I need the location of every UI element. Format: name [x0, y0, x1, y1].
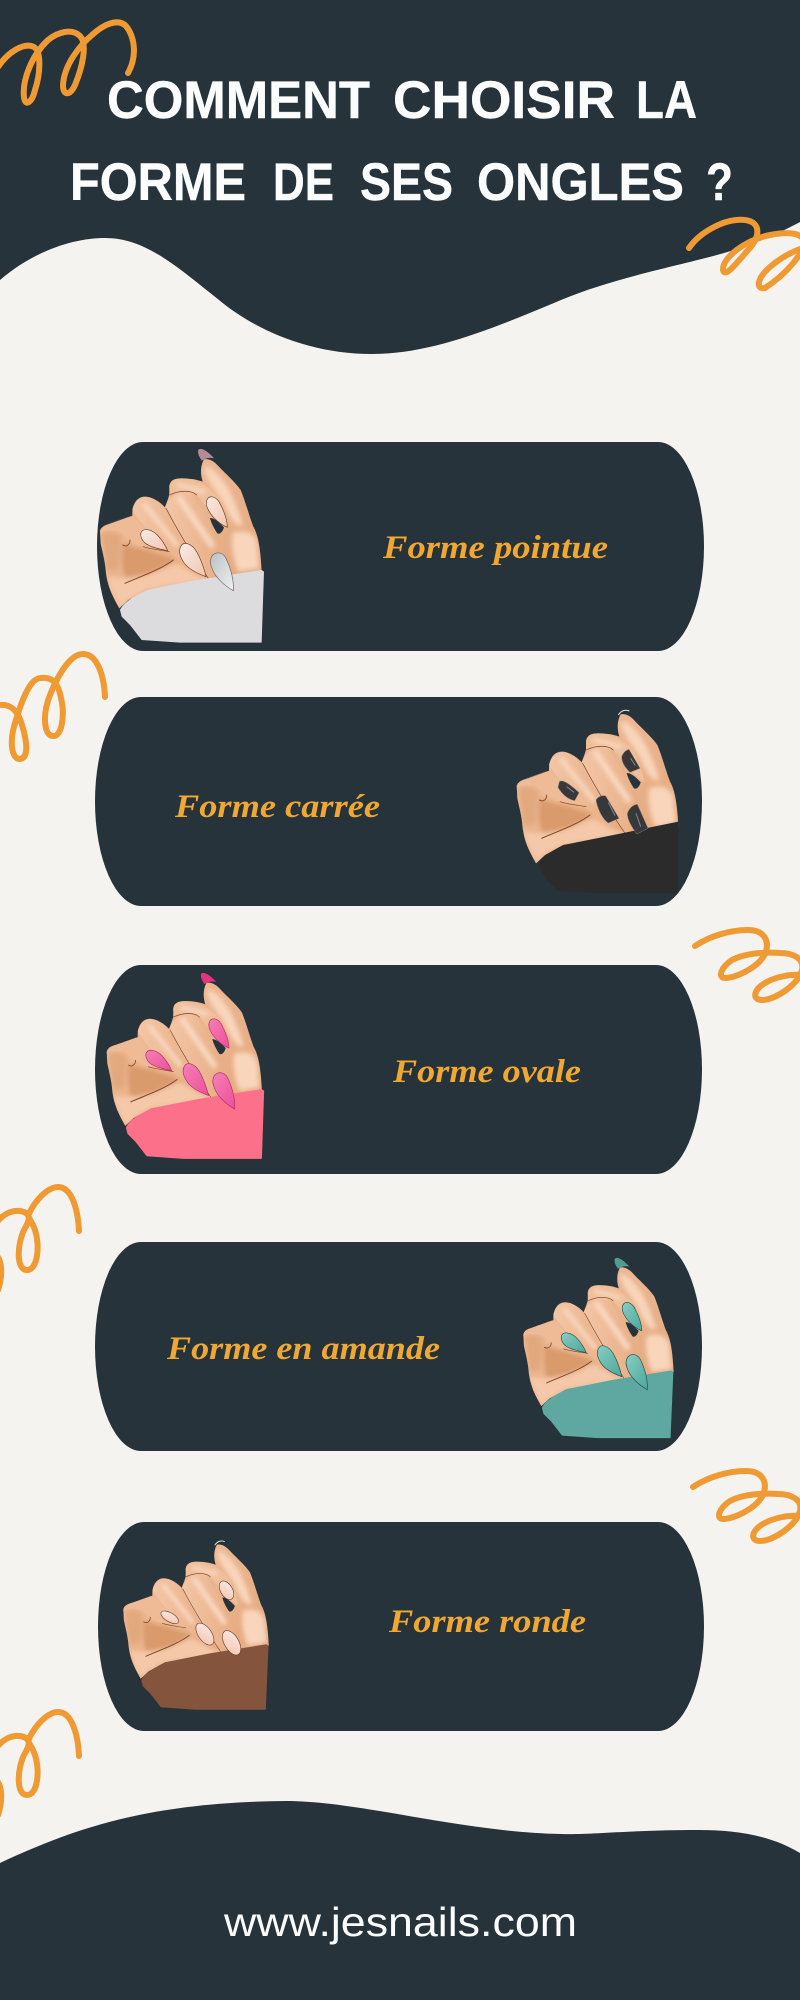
- website url: www.jesnails.com: [223, 1899, 577, 1945]
- hand illustration: almond nails: [523, 1258, 674, 1438]
- title: COMMENT: [107, 71, 370, 130]
- card background: [98, 1522, 704, 1731]
- squiggle: bottom left: [0, 1712, 79, 1815]
- panel: forme ronde: [98, 1522, 704, 1731]
- panel: forme ovale: [95, 965, 702, 1174]
- title: [70, 71, 733, 212]
- hand illustration: round nails: [123, 1541, 269, 1710]
- label: Forme ovale: [392, 1054, 581, 1090]
- squiggle: top left: [0, 22, 134, 103]
- squiggle: left of square card: [0, 654, 105, 759]
- title: ?: [706, 153, 733, 212]
- squiggle: right of round card: [693, 1471, 800, 1541]
- hand illustration: square nails: [517, 710, 678, 893]
- label: Forme en amande: [166, 1331, 440, 1367]
- hand illustration: oval nails: [107, 973, 264, 1159]
- title: ONGLES: [477, 153, 684, 212]
- squiggle: right of oval card: [695, 930, 800, 1000]
- card background: [95, 965, 702, 1174]
- label: Forme pointue: [382, 530, 608, 566]
- squiggle: top right: [689, 220, 800, 288]
- title: SES: [360, 153, 453, 212]
- card background: [95, 697, 702, 906]
- squiggle: left of almond card: [0, 1187, 79, 1290]
- hand illustration: pointed nails: [100, 449, 264, 643]
- header wave: [0, 0, 800, 354]
- panel: forme en amande: [95, 1242, 702, 1451]
- card background: [97, 442, 704, 651]
- title: CHOISIR: [393, 71, 615, 130]
- panel: forme carree: [95, 697, 702, 906]
- label: Forme carrée: [174, 789, 380, 825]
- label: Forme ronde: [388, 1604, 586, 1640]
- title: DE: [273, 153, 334, 212]
- card background: [95, 1242, 702, 1451]
- panel: forme pointue: [97, 442, 704, 651]
- footer wave: [0, 1801, 800, 2000]
- title: LA: [636, 71, 697, 130]
- title: FORME: [70, 153, 246, 212]
